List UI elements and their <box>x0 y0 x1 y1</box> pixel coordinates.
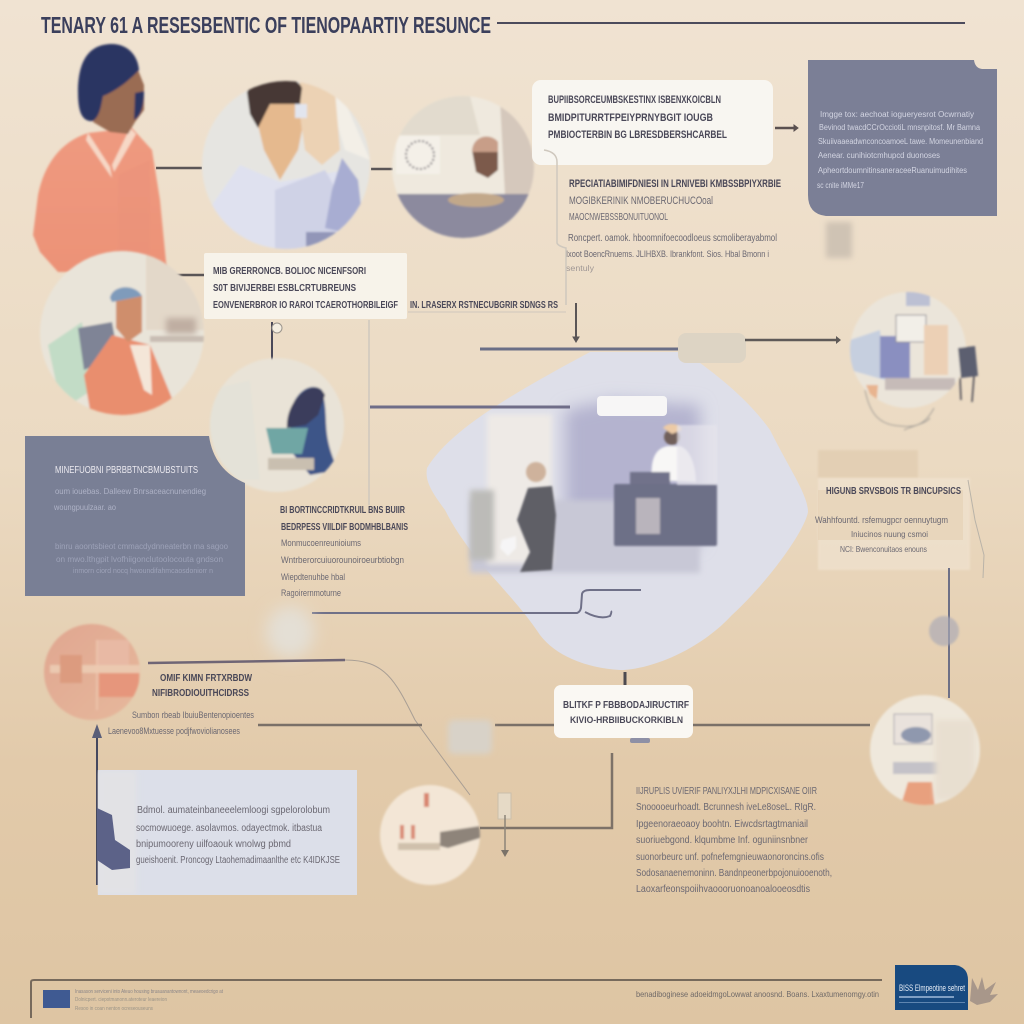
icon: lower circle <box>380 785 480 885</box>
connector: right vertical with node <box>929 568 959 698</box>
text block: beside peach circle <box>108 673 254 736</box>
text block: upper center: MAOCNWEBSSBONUITUONOL <box>569 212 668 223</box>
callout box: left center: S0T BIVIJERBEI ESBLCRTUBREUNS <box>213 283 356 294</box>
text block: upper center: sentuly <box>566 264 594 273</box>
footer: Resoo in coan nenton ocreseouseuns <box>75 1006 153 1012</box>
panel: slate left: oum iouebas. Dalleew Bnrsaceacnunendieg <box>55 486 206 496</box>
callout box: left center: MIB GRERRONCB. BOLIOC NICENFSORI <box>213 266 366 277</box>
text block: lower right: suoriuebgond. klqumbme Inf. oguniinsnbner <box>636 835 809 846</box>
footer badge <box>895 965 968 1010</box>
text block: center left: Ragoirernmoturne <box>281 588 341 599</box>
panel: slate left: inmorn ciord nocq hwoundifahmcaosdoniorr n <box>73 566 213 575</box>
text block: beside peach circle: Sumbon rbeab IbuiuBentenopioentes <box>132 710 254 720</box>
text block: right center: Wahhfountd. rsfemugpcr oennuytugm <box>815 515 948 526</box>
text block: lower right: Ipgeenoraeoaoy boohtn. Eiwcdsrtagtmaniail <box>636 819 808 830</box>
arrow: bar to right circle <box>678 333 841 363</box>
panel: slate left: binru aoontsbieot cmmacdydnneaterbn ma sagoo <box>55 542 229 551</box>
callout box: upper center: PMBIOCTERBIN BG LBRESDBERSHCARBEL <box>548 129 727 141</box>
panel: slate top right: Bevinod twacdCCrOcciotiL mnsnpitosf. Mr Bamna <box>819 123 980 132</box>
text block: beside peach circle: OMIF KIMN FRTXRBDW <box>160 673 252 684</box>
text block: lower right: Snooooeurhoadt. Bcrunnesh iveLe8oseL. RIgR. <box>636 802 816 813</box>
icon: office circle right <box>850 290 978 430</box>
callout box: bottom center: BLITKF P FBBBODAJIRUCTIRF <box>563 699 689 711</box>
panel: slate left <box>25 436 245 596</box>
icon: peach circle <box>44 624 140 720</box>
text block: upper center <box>566 178 781 273</box>
panel: slate top right: ApheortdoumnitinsaneraceeRuanuimudihites <box>818 166 967 175</box>
scene: purple room <box>470 400 700 573</box>
panel: slate top right <box>808 60 997 216</box>
text block: center left: BEDRPESS VIILDIF BODMHBLBANIS <box>281 522 408 533</box>
blurred node on line <box>448 720 492 754</box>
icon: man circle <box>202 77 370 252</box>
arrow down to bar <box>573 303 579 342</box>
text block: upper center: RPECIATIABIMIFDNIESI IN LRNIVEBI KMBSSBPIYXRBIE <box>569 178 781 190</box>
panel: lavender lower left: Bdmol. aumateinbaneeelemloogi sgpelorolobum <box>137 805 330 816</box>
panel: slate top right: Imgge tox: aechoat iogueryesrot Ocwrnatiy <box>820 110 974 119</box>
text block: center left: Wntrberorcuiuorounoiroeurbtiobgn <box>281 555 404 566</box>
text block: lower right: Laoxarfeonspoiihvaoooruonoanoalooeosdtis <box>636 884 810 895</box>
connector: horizontal center line <box>258 672 870 725</box>
callout box: bottom center <box>554 685 693 743</box>
footer: benadiboginese adoeidmgoLowwat anoosnd. Boans. Lxaxtumenomgy.otin <box>636 989 879 999</box>
footer logo left <box>43 990 70 1008</box>
footer: BISS Elmpeotine sehret <box>899 983 965 993</box>
callout box: bottom center: KIVIO-HRBIIBUCKORKIBLN <box>570 715 683 726</box>
callout box: upper center: BMIDPITURRTFPEIYPRNYBGIT IOUGB <box>548 112 713 124</box>
callout box: upper center: BUPIIBSORCEUMBSKESTINX ISBENXKOICBLN <box>548 94 721 106</box>
text block: upper center: Roncpert. oamok. hboomnifoecoodloeus scmoliberayabmol <box>568 233 777 244</box>
panel: lavender lower left: gueishoenit. Proncogy Ltaohemadimaanlthe etc K4IDKJSE <box>136 855 340 866</box>
icon: seated man circle <box>40 250 204 416</box>
text block: right center: NCI: Bwenconuitaos enouns <box>840 544 927 554</box>
panel: slate left: woungpuulzaar. ao <box>53 502 116 512</box>
connector: lines across blob <box>312 349 698 617</box>
icon: woman in coral shirt <box>33 44 167 272</box>
center blob with scene <box>427 352 808 670</box>
arrow: vertical up left <box>92 724 102 885</box>
icon: desk circle <box>392 95 540 244</box>
scene: seated figure <box>500 462 556 572</box>
callout box: upper center <box>532 80 773 165</box>
panel: slate left: MINEFUOBNI PBRBBTNCBMUBSTUITS <box>55 465 198 476</box>
scene: left window <box>470 414 552 564</box>
blurred patch: left soft shape <box>266 606 314 658</box>
connector: pin under callout <box>272 322 282 385</box>
text block: right center: HIGUNB SRVSBOIS TR BINCUPSICS <box>826 486 961 497</box>
connector: brown elbow <box>480 753 612 828</box>
text block: center left: Monmucoenreunioiums <box>281 538 361 549</box>
scene: window glare <box>677 425 717 485</box>
text block: right center <box>815 450 984 578</box>
title: TENARY 61 A RESESBENTIC OF TIENOPAARTIY RESUNCE <box>41 12 491 38</box>
callout box: left center <box>204 253 407 319</box>
text block: upper center: Ixoot BoencRnuems. JLIHBXB. Ibrankfont. Sios. Hbal Bmonn i <box>566 249 769 259</box>
footer: Dolnicpert. ciepotmanonn.ateroteur leaereion <box>75 997 167 1003</box>
text block: beside peach circle: NIFIBRODIOUITHCIDRSS <box>152 688 249 699</box>
panel: lavender lower left: socmowuoege. asolavmos. odayectmok. itbastua <box>136 823 322 834</box>
footer <box>31 965 998 1018</box>
text block: center left: Wiepdtenuhbe hbal <box>281 572 345 583</box>
text block: lower right: Sodosanaenemoninn. Bandnpeonerbpojonuiooenoth, <box>636 868 832 879</box>
panel: lavender lower left: bnipumooreny uilfoaouk wnolwg pbmd <box>136 839 291 850</box>
arrow: small vertical down <box>498 793 511 857</box>
text block: lower right: suonorbeurc unf. pofnefemgnieuwaonoroncins.ofis <box>636 852 824 863</box>
connector: peach circle to lower circle <box>148 660 470 795</box>
blurred patch: below slate panel <box>826 222 852 258</box>
text block: beside peach circle: Laenevoo8Mxtuesse podjfwoviolianosees <box>108 726 240 736</box>
text block: lower right: IIJRUPLIS UVIERIF PANLIYXJLHI MDPICXISANE OIIR <box>636 786 817 797</box>
icon: small circle bottom right <box>870 695 980 808</box>
text block: center left: BI BORTINCCRIDTKRUIL BNS BUIIR <box>280 505 406 516</box>
arrow to panel <box>775 125 798 131</box>
icon: plant <box>970 977 998 1005</box>
text block: right center: Iniucinos nuung csmoi <box>851 529 928 539</box>
text block: upper center: MOGIBKERINIK NMOBERUCHUCOoal <box>569 195 713 207</box>
text block: center left <box>280 505 408 599</box>
text block: lower right <box>636 786 832 895</box>
panel: slate top right: SkuiivaaeadwnconcoamoeL tawe. Momeunenbiand <box>818 137 983 146</box>
panel: slate top right: Aenear. cunihiotcmhupcd duonoses <box>818 151 940 160</box>
callout box: left center: EONVENERBROR IO RAROI TCAEROTHORBILEIGF <box>213 300 398 311</box>
scene: man in white at desk <box>614 424 717 546</box>
connector lines: top row <box>156 168 393 275</box>
footer: Inasason serviceni into Ateuo housing bruauanantownont, meaeoedcrigo at <box>75 989 224 995</box>
icon: woman with laptop circle <box>208 358 344 492</box>
panel: lavender lower left <box>97 770 357 895</box>
panel: slate top right: sc cnite iMMe17 <box>817 181 864 190</box>
label pill <box>597 396 667 416</box>
panel: slate left: on mwo.lthgpit lvofhiigonclutoolocouta gndson <box>56 555 223 564</box>
label strip beside callout: IN. LRASERX RSTNECUBGRIR SDNGS RS <box>410 299 558 311</box>
connector: thin vertical lines <box>369 150 566 505</box>
